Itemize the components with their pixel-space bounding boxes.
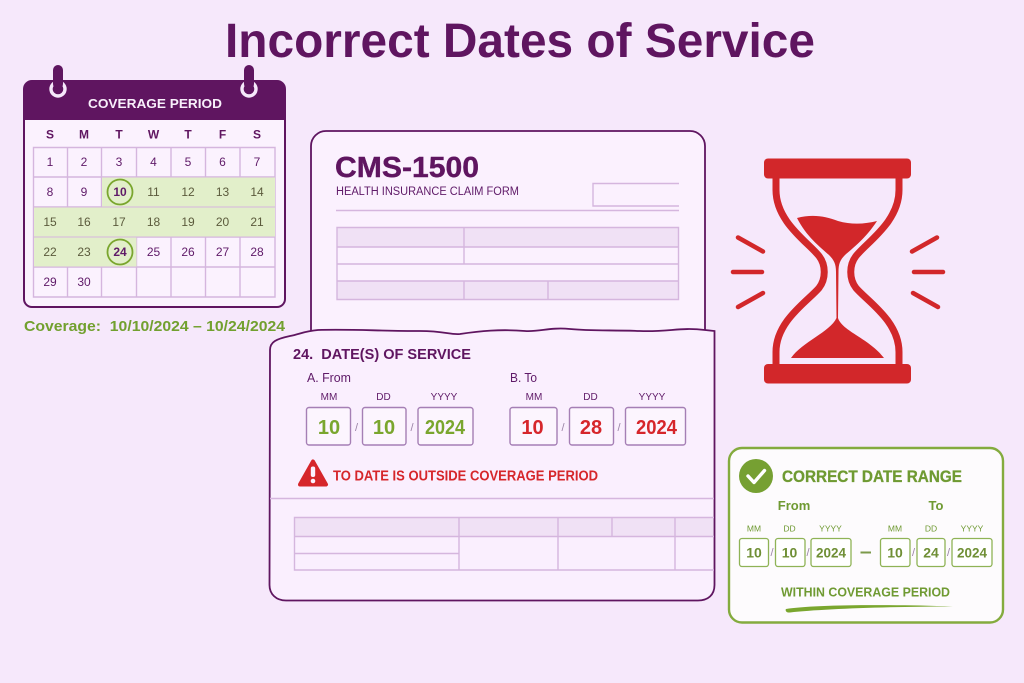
calendar header	[24, 81, 285, 120]
field labels: YYYY	[961, 524, 984, 534]
calendar days: 3	[116, 155, 123, 169]
from date fields: A. From	[307, 371, 351, 385]
calendar days: 13	[216, 185, 229, 199]
calendar days: 24	[113, 245, 127, 259]
field labels: DD	[783, 524, 796, 534]
hourglass sand	[791, 216, 884, 358]
coverage dates caption: Coverage: 10/10/2024 – 10/24/2024	[24, 318, 286, 335]
date fields: /	[806, 547, 810, 559]
date fields: /	[912, 547, 916, 559]
to date fields: 2024	[636, 417, 678, 439]
coverage highlight	[34, 178, 275, 266]
calendar days: 26	[181, 245, 195, 259]
calendar rings	[51, 65, 256, 96]
date fields: /	[947, 547, 951, 559]
to date fields	[510, 371, 686, 445]
from and to labels: From	[778, 498, 810, 513]
calendar days: 28	[250, 245, 264, 259]
to date fields: MM	[526, 392, 542, 403]
calendar days: 5	[185, 155, 192, 169]
calendar days: 9	[81, 185, 88, 199]
date fields: /	[770, 547, 774, 559]
icon: red hourglass	[733, 158, 943, 384]
date fields: 2024	[957, 544, 987, 560]
calendar days: 19	[181, 215, 195, 229]
date fields: 2024	[816, 544, 846, 560]
from date fields: /	[355, 422, 359, 434]
from date fields: MM	[321, 392, 337, 403]
weekday labels: S	[253, 128, 261, 142]
weekday labels: S	[46, 128, 54, 142]
from date fields: DD	[376, 392, 391, 403]
warning message: TO DATE IS OUTSIDE COVERAGE PERIOD	[333, 468, 598, 484]
calendar days: 21	[250, 215, 264, 229]
weekday labels: W	[148, 128, 160, 142]
weekday labels: M	[79, 128, 89, 142]
icon: warning triangle	[300, 462, 326, 484]
from and to labels	[778, 498, 944, 513]
field labels: MM	[888, 524, 902, 534]
date fields: 10	[887, 544, 903, 560]
field labels: DD	[925, 524, 937, 534]
to date fields: B. To	[510, 371, 537, 385]
calendar days: 1	[47, 155, 54, 169]
to date fields: DD	[583, 392, 598, 403]
weekday labels: T	[184, 128, 192, 142]
weekday labels: F	[219, 128, 226, 142]
from date fields: 10	[373, 417, 395, 439]
urgency rays	[733, 238, 943, 307]
calendar days: 25	[147, 245, 160, 259]
from date fields: YYYY	[431, 392, 458, 403]
from and to labels: To	[929, 498, 944, 513]
calendar days: 2	[81, 155, 88, 169]
field labels: MM	[747, 524, 761, 534]
weekday labels	[46, 128, 261, 142]
to date fields: /	[617, 422, 621, 434]
panel heading: CORRECT DATE RANGE	[782, 468, 962, 486]
form fields table	[337, 228, 678, 300]
calendar grid	[34, 147, 275, 297]
calendar days: 6	[219, 155, 226, 169]
to date fields: YYYY	[639, 392, 666, 403]
hourglass frame	[776, 178, 899, 365]
within coverage message: WITHIN COVERAGE PERIOD	[781, 584, 950, 600]
calendar days: 16	[77, 215, 91, 229]
from date fields: /	[410, 422, 414, 434]
date fields: 10	[746, 544, 762, 560]
calendar days	[43, 155, 264, 289]
weekday labels: T	[115, 128, 123, 142]
calendar days: 4	[150, 155, 157, 169]
lower form table	[270, 498, 714, 570]
panel: CMS-1500 form top	[311, 131, 705, 345]
calendar days: 10	[113, 185, 127, 199]
calendar days: 20	[216, 215, 229, 229]
calendar days: 22	[43, 245, 57, 259]
from date fields	[306, 371, 473, 445]
field labels	[747, 524, 984, 534]
calendar days: 14	[250, 185, 264, 199]
date fields: 24	[923, 544, 939, 560]
calendar days: 18	[147, 215, 160, 229]
calendar days: 8	[47, 185, 54, 199]
icon: green check	[739, 459, 773, 493]
calendar days: 29	[43, 275, 57, 289]
calendar days: 12	[181, 185, 195, 199]
form title: CMS-1500	[335, 152, 479, 184]
form header box	[336, 184, 679, 210]
section heading: 24. DATE(S) OF SERVICE	[293, 347, 471, 363]
date fields	[740, 538, 992, 566]
circled start and end dates	[108, 180, 132, 264]
calendar days: 15	[43, 215, 57, 229]
from date fields: 2024	[425, 417, 466, 439]
calendar days: 7	[254, 155, 261, 169]
from date fields: 10	[318, 417, 340, 439]
field labels: YYYY	[819, 524, 842, 534]
calendar days: 11	[147, 185, 160, 199]
to date fields: 10	[521, 417, 544, 439]
brush underline	[786, 605, 953, 613]
calendar days: 30	[77, 275, 91, 289]
form subtitle: HEALTH INSURANCE CLAIM FORM	[336, 186, 519, 198]
panel: torn section 24 dates of service	[270, 329, 714, 600]
to date fields: 28	[580, 417, 602, 439]
calendar days: 23	[77, 245, 91, 259]
to date fields: /	[561, 422, 565, 434]
panel: correct date range	[729, 448, 1003, 622]
calendar header: COVERAGE PERIOD	[88, 96, 222, 111]
title: Incorrect Dates of Service	[225, 14, 815, 68]
calendar days: 17	[112, 215, 126, 229]
panel: coverage calendar	[24, 65, 285, 307]
calendar days: 27	[216, 245, 229, 259]
date fields: 10	[782, 544, 797, 560]
